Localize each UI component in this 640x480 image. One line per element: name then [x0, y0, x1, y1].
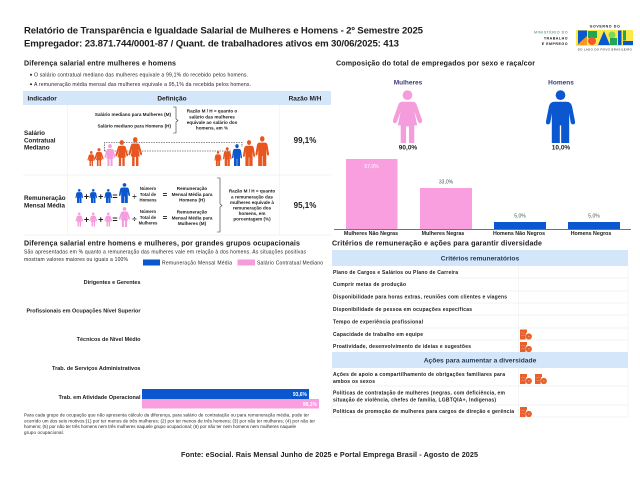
- bar chart: sexo e raça/cor: Mulheres Negras: [422, 231, 464, 237]
- definition: salário mediano: salário das mulheres: [189, 114, 235, 119]
- bar chart: sexo e raça/cor: 5,0%: [588, 214, 600, 220]
- equation: mulheres: Mulheres: [139, 220, 158, 226]
- definition: salário mediano: Salário mediano para Homens (H): [97, 123, 171, 128]
- definition: razão remuneração: mulheres equivale à: [230, 200, 274, 205]
- footnote: ocorrido um dos seis motivos:(1) por ter menos de três mulheres; (2) por ter menos de três homens; (3) por não ter mulheres; (4) por não ter: [24, 418, 316, 424]
- bar chart: grupos ocupacionais: Trab. de Serviços Administrativos: [52, 366, 140, 372]
- legend: Remuneração Mensal Média: [162, 260, 232, 266]
- panel: critérios remuneratórios: Critérios remuneratórios: [441, 256, 519, 262]
- bullets: A remuneração média mensal das mulheres equivale a 95,1% da recebida pelos homens.: [34, 82, 251, 88]
- equation: mulheres: ÷: [132, 214, 137, 224]
- table header: Definição: [157, 96, 187, 102]
- equation: mulheres: [75, 207, 213, 227]
- equation: mulheres: +: [98, 214, 103, 224]
- panel: critérios remuneratórios: Capacidade de trabalho em equipe: [333, 332, 423, 338]
- icon: selo promoção: [520, 407, 532, 417]
- icon: mulheres 90,0%: [393, 80, 423, 152]
- definition: salário mediano: equivale ao salário dos: [187, 120, 238, 125]
- definition: salário mediano: [95, 107, 238, 133]
- equation: homens: Mensal Média para: [172, 192, 213, 197]
- logo: ministério e governo: DO LADO DO POVO BRASILEIRO: [578, 48, 633, 52]
- logo: ministério e governo: E EMPREGO: [542, 42, 568, 46]
- equation: homens: =: [112, 192, 118, 202]
- icon: homens 10,0%: Homens: [548, 80, 574, 86]
- equation: homens: Homens: [140, 198, 157, 202]
- bullets: [30, 72, 251, 88]
- footnote: homens; (5) por não ter três homens nem três mulheres naquele grupo ocupacional; (6) por não ter nem homens nem mulheres naquele: [24, 424, 296, 429]
- bar chart: sexo e raça/cor: 5,0%: [514, 214, 526, 220]
- bar chart: sexo e raça/cor: [334, 159, 631, 237]
- icon: mulheres, escala salarial: [87, 137, 142, 166]
- panel: critérios remuneratórios: Proatividade, desenvolvimento de ideias e sugestões: [333, 344, 471, 350]
- panel: ações para aumentar a diversidade: Ações de apoio a compartilhamento de obrigações familiares para: [333, 372, 505, 378]
- equation: homens: Número: [140, 186, 156, 191]
- title: [24, 26, 424, 50]
- equation: homens: [75, 183, 213, 203]
- icon: selo capacidade: [520, 330, 532, 340]
- title: Relatório de Transparência e Igualdade Salarial de Mulheres e Homens - 2º Semestre 2025: [24, 26, 424, 36]
- equation: homens: Homens (H): [179, 198, 205, 203]
- equation: mulheres: Mensal Média para: [172, 215, 213, 220]
- panel: ações para aumentar a diversidade: [332, 352, 628, 417]
- equation: mulheres: =: [112, 214, 118, 224]
- panel: critérios remuneratórios: Disponibilidade de pessoa em ocupações específicas: [333, 307, 472, 313]
- source: Fonte: eSocial. Rais Mensal Junho de 2025 e Portal Emprega Brasil - Agosto de 2025: [181, 450, 478, 459]
- equation: mulheres: =: [163, 214, 168, 222]
- bullets: O salário contratual mediano das mulheres equivale a 99,1% do recebido pelos homens.: [34, 72, 248, 78]
- indicator: salário contratual mediano: [24, 130, 56, 152]
- definition: razão remuneração: a remuneração das: [231, 194, 273, 199]
- bar chart: sexo e raça/cor: Homens Negros: [571, 231, 611, 237]
- value: 99,1%: 99,1%: [294, 136, 316, 145]
- indicator: remuneração mensal média: Remuneração: [24, 195, 66, 202]
- bar chart: grupos ocupacionais: Dirigentes e Gerentes: [84, 280, 140, 286]
- bar chart: sexo e raça/cor: Mulheres Não Negras: [344, 231, 398, 237]
- panel: critérios remuneratórios: Disponibilidade para horas extras, reuniões com clientes e viagens: [333, 294, 507, 300]
- icon: homens 10,0%: 10,0%: [552, 144, 570, 152]
- equation: homens: ÷: [132, 192, 137, 201]
- equation: mulheres: Total de: [140, 215, 157, 220]
- legend: [143, 260, 323, 266]
- panel: ações para aumentar a diversidade: Políticas de promoção de mulheres para cargos de direção e gerência: [333, 409, 514, 415]
- definition: razão remuneração: remuneração dos: [233, 205, 272, 210]
- panel: ações para aumentar a diversidade: ambos os sexos: [333, 379, 375, 385]
- bar chart: grupos ocupacionais: Profissionais em Ocupações Nível Superior: [26, 308, 141, 314]
- icon: selo proatividade: [520, 342, 532, 352]
- definition: razão remuneração: homens, em: [239, 211, 265, 216]
- equation: mulheres: +: [84, 214, 89, 224]
- bar chart: grupos ocupacionais: Trab. em Atividade Operacional: [58, 395, 141, 401]
- definition: salário mediano: Razão M / H = quanto o: [187, 109, 237, 114]
- table header: [23, 91, 331, 105]
- icon: selos apoio: [520, 374, 547, 384]
- panel: ações para aumentar a diversidade: situação de violência, chefes de família, LGBTQIA+, Indígenas): [333, 398, 496, 404]
- panel: critérios remuneratórios: Plano de Cargos e Salários ou Plano de Carreira: [333, 270, 458, 276]
- bar chart: sexo e raça/cor: Homens Não Negros: [493, 231, 545, 237]
- heading: grandes grupos ocupacionais: Diferença salarial entre homens e mulheres, por grandes grupos ocupacionais: [24, 240, 300, 248]
- equation: homens: Remuneração: [177, 186, 207, 191]
- definition: razão remuneração: porcentagem (%): [233, 217, 271, 222]
- panel: critérios remuneratórios: Cumprir metas de produção: [333, 282, 406, 288]
- logo: ministério e governo: TRABALHO: [544, 36, 568, 40]
- panel: ações para aumentar a diversidade: Ações para aumentar a diversidade: [424, 358, 537, 364]
- heading: composição: Composição do total de empregados por sexo e raça/cor: [336, 60, 535, 68]
- logo: ministério e governo: MINISTÉRIO DO: [534, 30, 568, 34]
- panel: critérios remuneratórios: [332, 250, 628, 352]
- table header: Razão M/H: [289, 96, 322, 102]
- bar chart: sexo e raça/cor: 57,0%: [364, 164, 379, 170]
- equation: mulheres: Mulheres (M): [178, 221, 207, 226]
- equation: homens: +: [98, 192, 103, 202]
- legend: Salário Contratual Mediano: [257, 260, 323, 266]
- equation: homens: +: [84, 192, 89, 202]
- footnote: grupo ocupacional.: [24, 430, 64, 435]
- bar chart: grupos ocupacionais: [26, 280, 319, 408]
- definition: salário mediano: homens, em %: [196, 126, 228, 131]
- equation: mulheres: Remuneração: [177, 210, 207, 214]
- icon: mulheres 90,0%: Mulheres: [394, 80, 423, 86]
- indicator: salário contratual mediano: Mediano: [24, 144, 50, 152]
- logo: ministério e governo: GOVERNO DO: [590, 24, 620, 28]
- indicator: salário contratual mediano: Salário: [24, 130, 45, 137]
- panel: ações para aumentar a diversidade: Políticas de contratação de mulheres (negras, com deficiência, em: [333, 390, 506, 396]
- heading: diferença salarial: Diferença salarial entre mulheres e homens: [24, 60, 176, 68]
- panel: tabela de indicadores: [23, 91, 331, 235]
- icon: homens 10,0%: [546, 80, 575, 152]
- bar chart: grupos ocupacionais: Técnicos de Nível Médio: [77, 337, 141, 343]
- description: São apresentadas em % quanto a remuneração das mulheres vale em relação à dos homens. As situações positivas: [24, 250, 306, 256]
- bar chart: sexo e raça/cor: 33,0%: [439, 180, 454, 186]
- panel: critérios remuneratórios: Tempo de experiência profissional: [333, 320, 424, 326]
- table header: Indicador: [28, 96, 57, 102]
- value: 95,1%: 95,1%: [294, 201, 316, 210]
- equation: homens: Total de: [140, 192, 157, 197]
- description: mostram valores maiores ou iguais a 100%: [24, 257, 129, 263]
- heading: critérios: Critérios de remuneração e ações para garantir diversidade: [332, 240, 542, 248]
- icon: mulheres 90,0%: 90,0%: [399, 144, 417, 152]
- equation: homens: =: [163, 190, 168, 200]
- bar chart: grupos ocupacionais: 93,6%: [293, 392, 308, 398]
- bar chart: grupos ocupacionais: 99,1%: [303, 402, 318, 408]
- definition: salário mediano: Salário mediano para Mulheres (M): [95, 112, 171, 117]
- logo: ministério e governo: [534, 24, 633, 52]
- definition: razão remuneração: Razão M / H = quanto: [229, 188, 275, 194]
- definition: razão remuneração: [217, 178, 275, 232]
- description: [24, 250, 306, 263]
- indicator: salário contratual mediano: Contratual: [24, 137, 56, 144]
- indicator: remuneração mensal média: [24, 195, 66, 209]
- footnote: [24, 412, 316, 435]
- dashed guides: [104, 142, 242, 151]
- indicator: remuneração mensal média: Mensal Média: [24, 202, 65, 209]
- footnote: Para cada grupo de ocupação que não apresenta cálculo da diferença, para salário de contratação ou para remuneração média, pode ter: [24, 412, 310, 418]
- equation: mulheres: Número: [140, 209, 156, 214]
- icon: homens, escala salarial: [214, 136, 269, 166]
- title: Empregador: 23.871.744/0001-87 / Quant. de trabalhadores ativos em 30/06/2025: 413: [24, 38, 399, 50]
